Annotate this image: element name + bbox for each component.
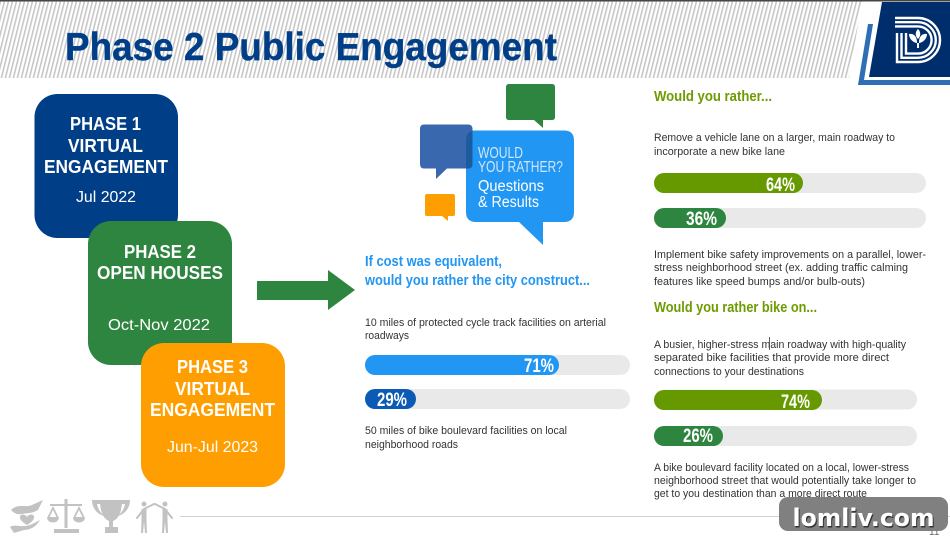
bar chart: 64 percent: [654, 173, 926, 196]
panel: phase 1 card: VIRTUAL: [68, 135, 143, 156]
watermark: lomliv.com: [794, 506, 936, 534]
bar chart: 74 percent: 74%: [781, 392, 810, 413]
heading: would you rather bike on: Would you rather bike on...: [654, 299, 817, 316]
text: option bike boulevard: [365, 425, 567, 451]
text: parallel street option: stress neighborhood street (ex. adding traffic calming: [654, 262, 908, 274]
text: bike boulevard option: [654, 462, 916, 500]
bar chart: 29 percent: [365, 389, 630, 411]
bar chart: 26 percent: 26%: [683, 426, 713, 447]
panel: phase 3 card: ENGAGEMENT: [150, 399, 276, 420]
phase 2 date: Oct-Nov 2022: [108, 317, 210, 334]
text: option bike boulevard: neighborhood roads: [365, 439, 458, 451]
icon: speech bubbles: Questions: [478, 178, 544, 195]
watermark: lomliv.com: [792, 504, 934, 532]
phase 1 label: PHASE 1: [70, 113, 141, 134]
text: main roadway option: [654, 337, 906, 378]
icon: scales: [47, 499, 85, 533]
bar chart: 64 percent: 64%: [766, 175, 795, 196]
bubble text: WOULD: [478, 145, 523, 162]
text: main roadway option: connections to your destinations: [654, 366, 804, 378]
bar chart: 74 percent: [654, 390, 917, 413]
icon: speech bubbles: [420, 84, 574, 245]
header band: [0, 0, 950, 78]
text: parallel street option: [654, 249, 926, 288]
text: main roadway option: separated bike facilities that provide more direct: [654, 352, 889, 364]
text: bike boulevard option: get to you destination than a more direct route: [654, 488, 867, 500]
bar chart: 26 percent: [654, 426, 917, 447]
panel: phase 2 card: OPEN HOUSES: [97, 262, 223, 283]
text: vehicle lane option: [654, 132, 895, 158]
heading: city construct question: would you rather the city construct...: [364, 272, 590, 289]
text: option cycle track: roadways: [365, 330, 409, 342]
phase 2 label: PHASE 2: [124, 241, 196, 262]
bar chart: 36 percent: [654, 208, 926, 230]
bar chart: 71 percent: 71%: [524, 356, 554, 377]
arrow: [257, 270, 355, 310]
icon: caring hands: [10, 500, 43, 533]
text: option cycle track: [365, 317, 606, 342]
panel: phase 1 card: ENGAGEMENT: [44, 156, 169, 177]
text: bike boulevard option: neighborhood street that would potentially take longer to: [654, 475, 916, 487]
panel: phase 3 card: [141, 343, 285, 487]
phase 3 date: Jun-Jul 2023: [167, 439, 258, 456]
bar chart: 29 percent: 29%: [377, 390, 407, 411]
text: vehicle lane option: incorporate a new bike lane: [654, 146, 785, 158]
phase 1 date: Jul 2022: [76, 189, 136, 206]
text: option bike boulevard: 50 miles of bike boulevard facilities on local: [365, 425, 567, 437]
heading: city construct question: [364, 253, 590, 289]
text: bike boulevard option: A bike boulevard facility located on a local, lower-stress: [654, 462, 909, 474]
panel: phase 2 card: [88, 221, 232, 365]
footer rule: [180, 516, 950, 517]
heading: city construct question: If cost was equivalent,: [365, 253, 502, 270]
logo: [858, 2, 950, 85]
bar chart: 36 percent: 36%: [686, 209, 717, 230]
panel: phase 3 card: VIRTUAL: [175, 378, 250, 399]
text: option cycle track: 10 miles of protected cycle track facilities on arterial: [365, 317, 606, 329]
bar chart: 71 percent: [365, 355, 630, 377]
text: vehicle lane option: Remove a vehicle lane on a larger, main roadway to: [654, 132, 895, 144]
heading: would you rather: Would you rather...: [654, 88, 772, 105]
icon: speech bubbles: & Results: [478, 194, 539, 211]
text: main roadway option: A busier, higher-stress main roadway with high-quality: [654, 339, 906, 351]
title: Phase 2 Public Engagement: [65, 26, 557, 69]
watermark: [779, 497, 948, 534]
text: parallel street option: features like speed bumps and/or bulb-outs): [654, 276, 865, 288]
icon: speech bubbles: YOU RATHER?: [478, 159, 563, 176]
icon: trophy: [92, 500, 130, 533]
text: parallel street option: Implement bike safety improvements on a parallel, lower-: [654, 249, 926, 261]
phase 3 label: PHASE 3: [177, 356, 248, 377]
icon: people: [137, 502, 172, 533]
panel: phase 1 card: [34, 94, 178, 238]
